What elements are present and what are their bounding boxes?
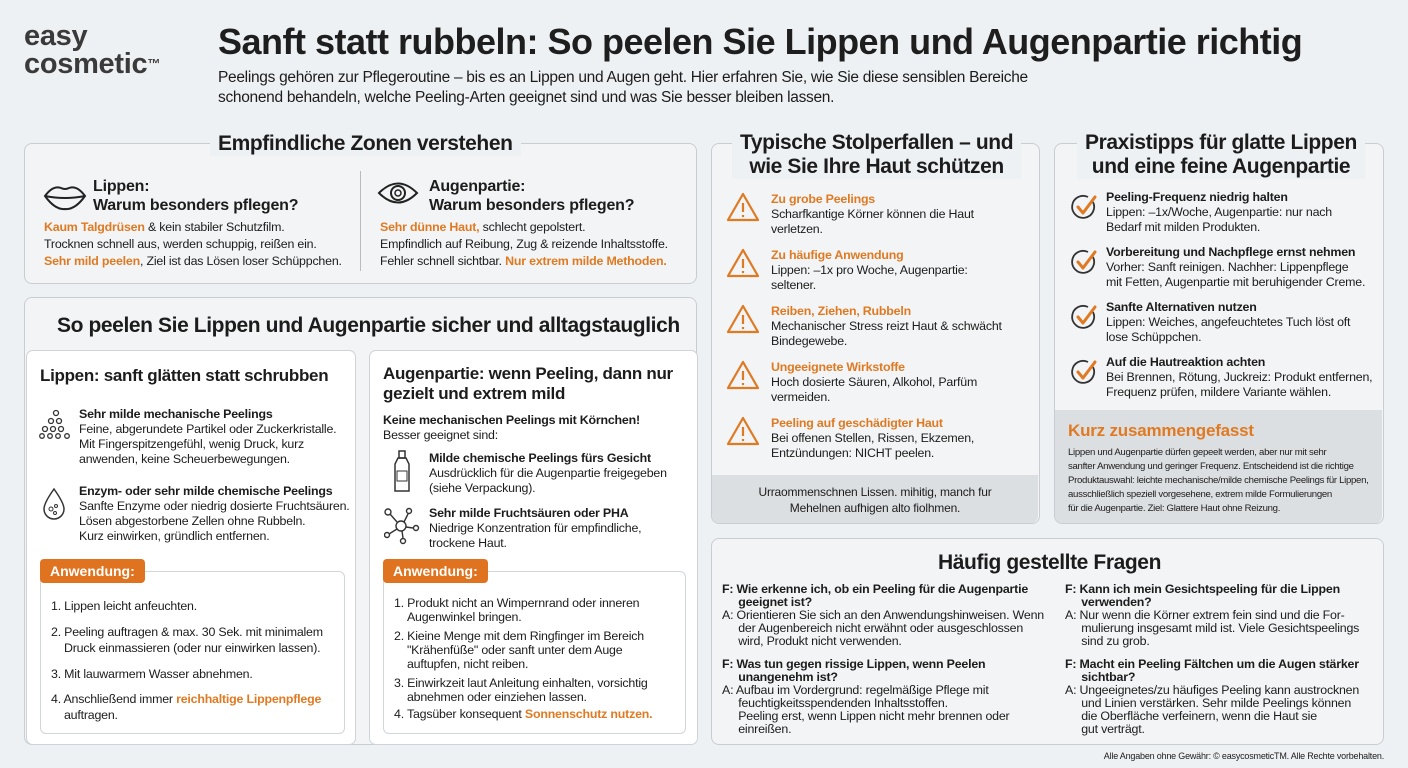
card: Augenpartie: gezielt und extrem mild	[383, 384, 565, 403]
FAQ left column: geeignet ist?	[738, 595, 812, 609]
warning items: Zu häufige Anwendung	[771, 248, 904, 262]
Anwendung box: Anwendung:	[393, 563, 478, 579]
Anwendung box: abnehmen oder einziehen lassen.	[407, 690, 587, 704]
Anwendung box: 2. Peeling auftragen & max. 30 Sek. mit minimalem	[51, 625, 323, 639]
card: Lippen: Sehr milde mechanische Peelings	[79, 407, 273, 421]
card: Lippen: Mit Fingerspitzengefühl, wenig Druck, kurz	[79, 437, 304, 451]
FAQ left column: A: Orientieren Sie sich an den Anwendungshinweisen. Wenn	[722, 608, 1044, 622]
panel: So peelen Sie	[24, 297, 697, 745]
warning items: Scharfkantige Körner können die Haut	[771, 207, 974, 221]
FAQ left column	[722, 582, 1044, 736]
summary box: sanfter Anwendung und geringer Frequenz. Entscheidend ist die richtige	[1068, 461, 1354, 472]
card: Lippen: anwenden, keine Scheuerbewegungen.	[79, 452, 290, 466]
Anwendung box: Druck einmassieren (oder nur einwirken lassen).	[64, 641, 320, 655]
FAQ left column: F: Was tun gegen rissige Lippen, wenn Peelen	[722, 657, 985, 671]
Anwendung box: 3. Einwirkzeit laut Anleitung einhalten, vorsichtig	[394, 676, 648, 690]
icon: bottle	[394, 450, 410, 492]
title: Sanft statt rubbeln: So peelen Sie Lippen und Augenpartie richtig	[218, 21, 1302, 62]
FAQ left column: unangenehm ist?	[738, 670, 838, 684]
heading: So peelen Sie Lippen und Augenpartie sicher und alltagstauglich	[57, 314, 680, 337]
warning items: vermeiden.	[771, 390, 830, 404]
warning items: seltener.	[771, 278, 816, 292]
tips: Bedarf mit milden Produkten.	[1106, 220, 1260, 234]
card: Augenpartie: Besser geeignet sind:	[383, 428, 498, 442]
FAQ right column: F: Kann ich mein Gesichtspeeling für die Lippen	[1065, 582, 1340, 596]
lips text: Lippen:	[93, 178, 149, 195]
Anwendung box: Anwendung:	[50, 563, 135, 579]
panel: FAQ	[711, 538, 1384, 745]
footer: Alle Angaben ohne Gewähr: © easycosmeticTM. Alle Rechte vorbehalten.	[1104, 751, 1384, 761]
eye text: Augenpartie:	[429, 178, 525, 195]
heading: und eine feine Augenpartie	[1092, 155, 1350, 178]
Anwendung box	[383, 571, 686, 734]
footer note: Urraommenschnen Lissen. mihitig, manch fur	[758, 485, 992, 499]
tips: Vorher: Sanft reinigen. Nachher: Lippenpflege	[1106, 260, 1348, 274]
panel: Empfindliche Zonen: Sehr mild peelen, Ziel ist das Lösen loser Schüppchen.	[44, 254, 342, 268]
FAQ right column: sind zu grob.	[1081, 634, 1150, 648]
summary box: Kurz zusammengefasst	[1068, 421, 1254, 440]
eye text	[429, 178, 634, 214]
heading: Praxistipps für glatte Lippen	[1085, 131, 1357, 154]
footer note	[712, 475, 1038, 523]
logo	[24, 20, 160, 80]
card: Lippen	[26, 350, 356, 745]
warning items: Mechanischer Stress reizt Haut & schwächt	[771, 319, 1002, 333]
card: Augenpartie: trockene Haut.	[429, 536, 507, 550]
FAQ left column: F: Wie erkenne ich, ob ein Peeling für die Augenpartie	[722, 582, 1028, 596]
FAQ right column: A: Nur wenn die Körner extrem fein sind und die For-	[1065, 608, 1345, 622]
FAQ left column: A: Aufbau im Vordergrund: regelmäßige Pflege mit	[722, 683, 989, 697]
tips: Vorbereitung und Nachpflege ernst nehmen	[1106, 245, 1355, 259]
lips text: Warum besonders pflegen?	[93, 197, 298, 214]
Anwendung box: 2. Kieine Menge mit dem Ringfinger im Bereich	[394, 629, 644, 643]
tips: Sanfte Alternativen nutzen	[1106, 300, 1257, 314]
warning items: Hoch dosierte Säuren, Alkohol, Parfüm	[771, 375, 977, 389]
FAQ right column: verwenden?	[1081, 595, 1152, 609]
card: Lippen: Enzym- oder sehr milde chemische Peelings	[79, 484, 332, 498]
Anwendung box: 1. Produkt nicht an Wimpernrand oder inneren	[394, 596, 639, 610]
card: Lippen: Lösen abgestorbene Zellen ohne Rubbeln.	[79, 514, 305, 528]
FAQ left column: einreißen.	[738, 722, 791, 736]
warning items: Bindegewebe.	[771, 334, 847, 348]
panel: Empfindliche Zonen: Kaum Talgdrüsen & kein stabiler Schutzfilm.	[44, 220, 284, 234]
icon: particles	[39, 410, 70, 439]
FAQ right column: gut verträgt.	[1081, 722, 1145, 736]
FAQ right column: die Oberfläche verfeinern, wenn die Haut sie	[1081, 709, 1317, 723]
card: Lippen: Feine, abgerundete Partikel oder Zuckerkristalle.	[79, 422, 336, 436]
summary box: Lippen und Augenpartie dürfen gepeelt werden, aber nur mit sehr	[1068, 447, 1326, 458]
FAQ left column: wird, Produkt nicht verwenden.	[738, 634, 902, 648]
card: Augenpartie: Niedrige Konzentration für empfindliche,	[429, 521, 641, 535]
tips	[1071, 190, 1372, 399]
summary box: ausschließlich speziell vorgesehene, extrem milde Formulierungen	[1068, 489, 1332, 500]
icon: molecule	[384, 508, 420, 544]
FAQ left column: der Augenbereich nicht erwähnt oder ausgeschlossen	[738, 621, 1023, 635]
tips: Frequenz prüfen, mildere Variante wählen.	[1106, 385, 1331, 399]
FAQ right column: A: Ungeeignetes/zu häufiges Peeling kann austrocknen	[1065, 683, 1359, 697]
summary box: für die Augenpartie. Ziel: Glattere Haut ohne Reizung.	[1068, 503, 1280, 514]
heading	[732, 131, 1021, 179]
card: Augenpartie: Augenpartie: wenn Peeling, dann nur	[383, 364, 673, 383]
tips: Bei Brennen, Rötung, Juckreiz: Produkt entfernen,	[1106, 370, 1372, 384]
warning items: verletzen.	[771, 222, 823, 236]
Anwendung box: "Krähenfüße" oder sanft unter dem Auge	[407, 643, 622, 657]
warning items	[726, 192, 1002, 460]
Anwendung box: auftupfen, nicht reiben.	[407, 657, 528, 671]
panel: Stolperfallen	[711, 143, 1040, 524]
card: Augenpartie	[369, 350, 698, 745]
FAQ right column: sichtbar?	[1081, 670, 1135, 684]
Anwendung box: 4. Tagsüber konsequent Sonnenschutz nutzen.	[394, 707, 652, 721]
warning items: Peeling auf geschädigter Haut	[771, 416, 943, 430]
panel: Empfindliche Zonen: Sehr dünne Haut, schlecht gepolstert.	[380, 220, 585, 234]
card: Lippen: Sanfte Enzyme oder niedrig dosierte Fruchtsäuren.	[79, 499, 350, 513]
warning items: Zu grobe Peelings	[771, 192, 875, 206]
panel: Empfindliche Zonen: Trocknen schnell aus, werden schuppig, reißen ein.	[44, 237, 317, 251]
heading: wie Sie Ihre Haut schützen	[749, 155, 1004, 178]
card: Augenpartie: Keine mechanischen Peelings mit Körnchen!	[383, 413, 640, 427]
tips: Lippen: –1x/Woche, Augenpartie: nur nach	[1106, 205, 1332, 219]
card: Augenpartie: Sehr milde Fruchtsäuren oder PHA	[429, 506, 628, 520]
warning items: Bei offenen Stellen, Rissen, Ekzemen,	[771, 431, 974, 445]
logo: cosmetic™	[24, 48, 160, 80]
card: Augenpartie: Milde chemische Peelings fürs Gesicht	[429, 451, 651, 465]
summary box	[1055, 410, 1382, 523]
heading: Empfindliche Zonen verstehen	[218, 132, 513, 155]
warning items: Reiben, Ziehen, Rubbeln	[771, 304, 911, 318]
Anwendung box: Augenwinkel bringen.	[407, 610, 521, 624]
tips: Lippen: Weiches, angefeuchtetes Tuch löst oft	[1106, 315, 1350, 329]
icon: drop	[43, 488, 65, 520]
panel: Empfindliche Zonen: Fehler schnell sichtbar. Nur extrem milde Methoden.	[380, 254, 667, 268]
subtitle: schonend behandeln, welche Peeling-Arten geeignet sind und was Sie besser bleiben lassen.	[218, 89, 834, 106]
panel: Empfindliche Zonen	[24, 143, 697, 284]
heading	[1077, 131, 1365, 179]
Anwendung box: 1. Lippen leicht anfeuchten.	[51, 599, 197, 613]
subtitle	[218, 69, 1028, 106]
FAQ right column: F: Macht ein Peeling Fältchen um die Augen stärker	[1065, 657, 1359, 671]
heading: Typische Stolperfallen – und	[740, 131, 1013, 154]
tips: mit Fetten, Augenpartie mit beruhigender Creme.	[1106, 275, 1365, 289]
Anwendung box: auftragen.	[64, 708, 118, 722]
card: Augenpartie: (siehe Verpackung).	[429, 481, 535, 495]
FAQ right column	[1065, 582, 1359, 736]
card: Lippen: Lippen: sanft glätten statt schrubben	[40, 366, 328, 385]
FAQ right column: und Linien verstärken. Sehr milde Peelings können	[1081, 696, 1351, 710]
icon: lips	[44, 186, 86, 210]
Anwendung box	[40, 571, 345, 734]
lips text	[93, 178, 298, 214]
tips: Peeling-Frequenz niedrig halten	[1106, 190, 1288, 204]
warning items: Lippen: –1x pro Woche, Augenpartie:	[771, 263, 968, 277]
panel: Praxistipps	[1054, 143, 1384, 524]
FAQ right column: mulierung insgesamt mild ist. Viele Gesichtspeelings	[1081, 621, 1359, 635]
eye text: Warum besonders pflegen?	[429, 197, 634, 214]
heading: Häufig gestellte Fragen	[938, 551, 1161, 574]
summary box: Produktauswahl: leichte mechanische/milde chemische Peelings für Lippen,	[1068, 475, 1368, 486]
warning items: Entzündungen: NICHT peelen.	[771, 446, 934, 460]
FAQ left column: feuchtigkeitsspendenden Inhaltsstoffen.	[738, 696, 948, 710]
warning items: Ungeeignete Wirkstoffe	[771, 360, 905, 374]
Anwendung box: 3. Mit lauwarmem Wasser abnehmen.	[51, 667, 253, 681]
Anwendung box: 4. Anschließend immer reichhaltige Lippenpflege	[51, 692, 321, 706]
subtitle: Peelings gehören zur Pflegeroutine – bis es an Lippen und Augen geht. Hier erfahren Sie, wie Sie diese sensiblen Bereiche	[218, 69, 1028, 86]
icon: eye	[378, 182, 418, 204]
footer note: Mehelnen aufhigen alto fiolhmen.	[790, 501, 960, 515]
panel: Empfindliche Zonen: Empfindlich auf Reibung, Zug & reizende Inhaltsstoffe.	[380, 237, 668, 251]
logo: easy	[24, 20, 87, 52]
tips: Auf die Hautreaktion achten	[1106, 355, 1265, 369]
card: Augenpartie: Ausdrücklich für die Augenpartie freigegeben	[429, 466, 667, 480]
card: Lippen: Kurz einwirken, gründlich entfernen.	[79, 529, 269, 543]
FAQ left column: Peeling erst, wenn Lippen nicht mehr brennen oder	[738, 709, 1009, 723]
tips: lose Schüppchen.	[1106, 330, 1201, 344]
